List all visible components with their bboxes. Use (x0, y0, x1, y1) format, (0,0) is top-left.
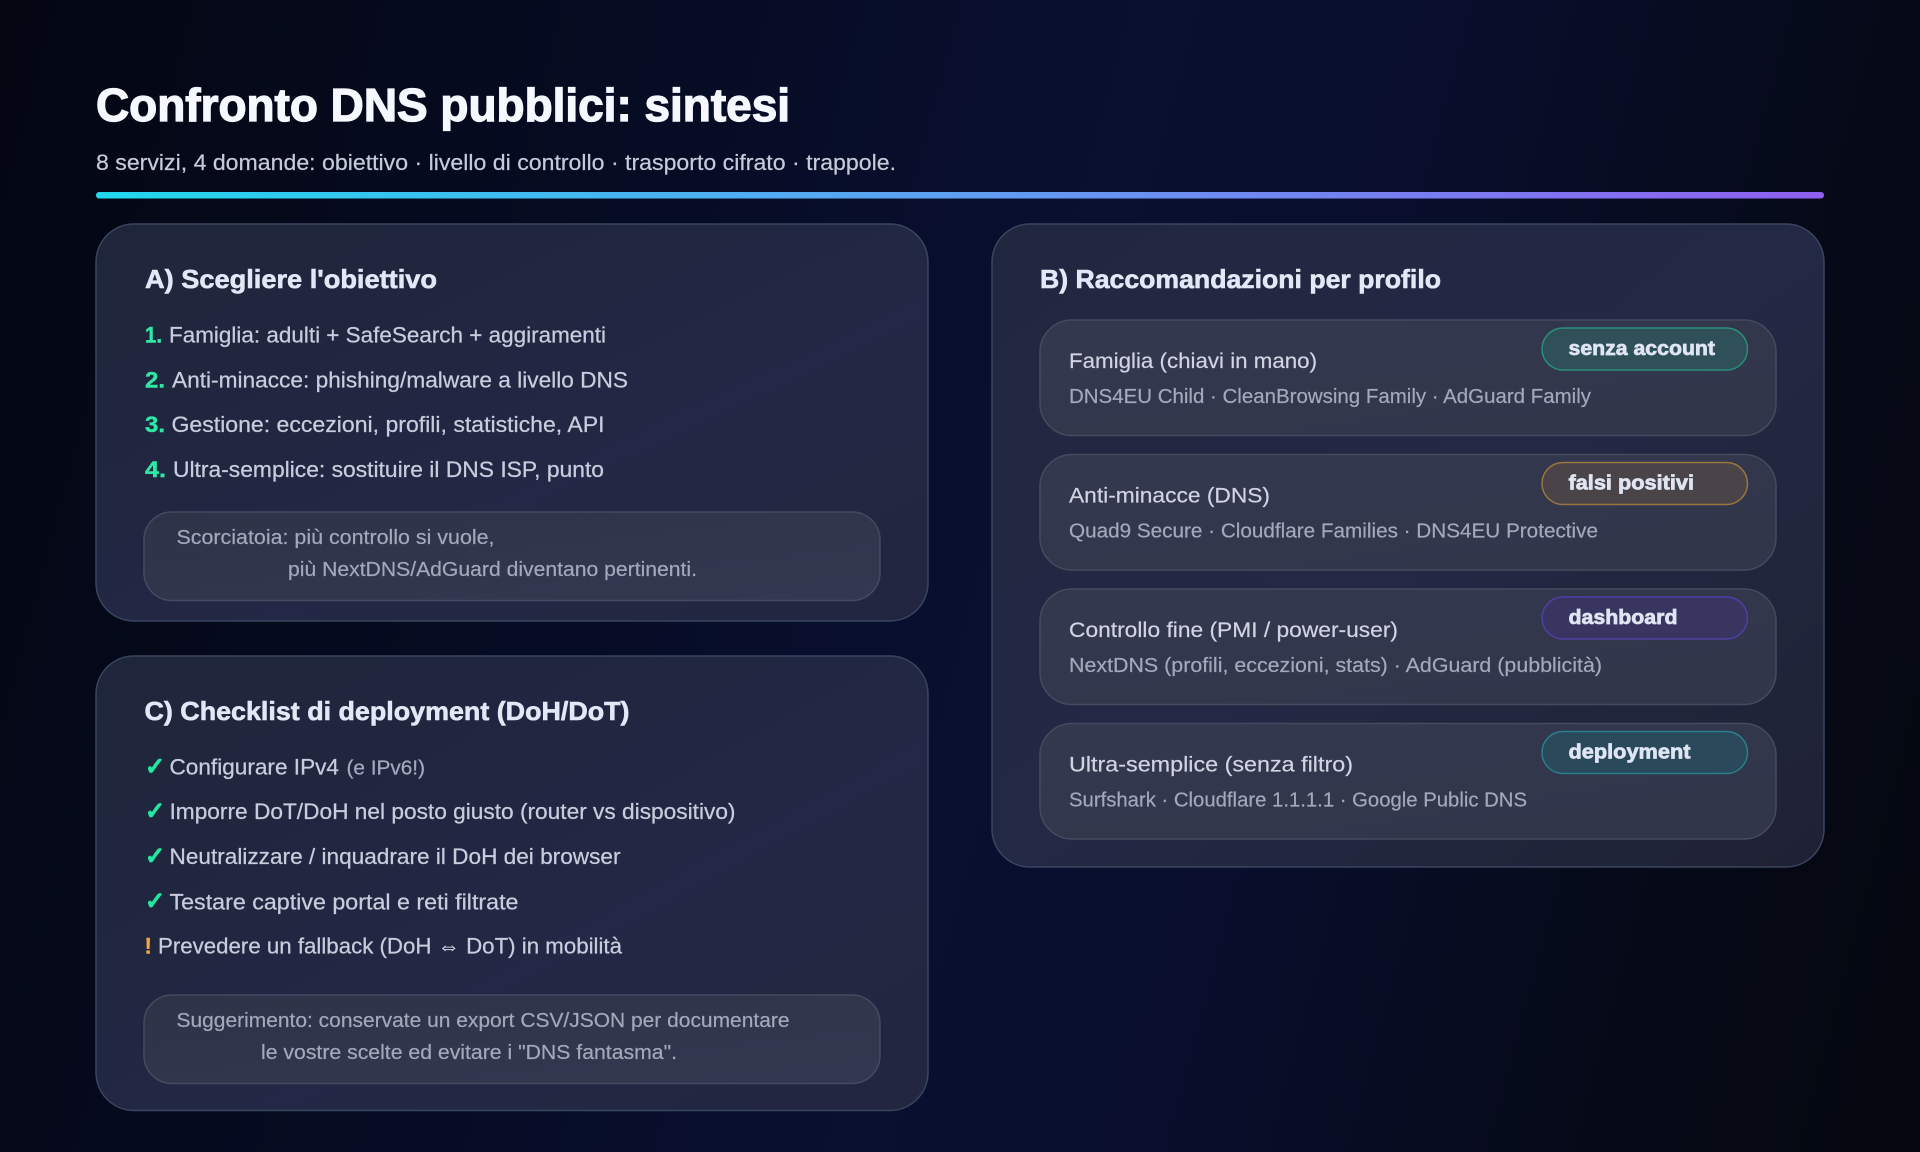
checklist item 2: ✓ (145, 797, 165, 825)
heading B: B) Raccomandazioni per profilo (1040, 264, 1441, 294)
heading A: A) Scegliere l'obiettivo (145, 264, 437, 294)
list item 3: 3. (145, 412, 165, 437)
checklist item 5: warning: Prevedere un fallback (DoH ⇔ DoT) in mobilità (158, 934, 623, 958)
profile: ultra-semplice: Ultra-semplice (senza filtro) (1069, 752, 1353, 776)
callout: scorciatoia (144, 512, 880, 600)
profile: ultra-semplice: Surfshark · Cloudflare 1.1.1.1 · Google Public DNS (1069, 790, 1527, 812)
profile: anti-minacce (1040, 454, 1776, 570)
badge: falsi positivi (1542, 462, 1748, 504)
badge: deployment (1542, 732, 1748, 774)
profile: controllo fine (1040, 589, 1776, 704)
callout: scorciatoia: più NextDNS/AdGuard diventano pertinenti. (288, 559, 697, 581)
panel: C) Checklist di deployment (96, 656, 928, 1110)
badge: dashboard (1542, 597, 1748, 639)
profile: famiglia: Famiglia (chiavi in mano) (1069, 349, 1317, 373)
list item 2: Anti-minacce: phishing/malware a livello DNS (172, 368, 628, 392)
badge: senza account: senza account (1568, 338, 1715, 360)
list item 4: Ultra-semplice: sostituire il DNS ISP, punto (173, 457, 604, 482)
profile: famiglia (1040, 320, 1776, 436)
panel: B) Raccomandazioni per profilo (992, 224, 1824, 867)
list item 4: 4. (145, 457, 166, 482)
checklist item 1: ✓ (145, 752, 165, 780)
profile: famiglia: DNS4EU Child · CleanBrowsing Family · AdGuard Family (1069, 386, 1591, 408)
list item 1: Famiglia: adulti + SafeSearch + aggiramenti (169, 322, 606, 348)
profile: ultra-semplice (1040, 724, 1776, 839)
checklist item 1: Configurare IPv4 (170, 754, 339, 780)
subtitle: 8 servizi, 4 domande: obiettivo · livello di controllo · trasporto cifrato · trappole. (96, 150, 896, 175)
profile: anti-minacce: Anti-minacce (DNS) (1069, 484, 1270, 508)
profile: anti-minacce: Quad9 Secure · Cloudflare Families · DNS4EU Protective (1069, 520, 1598, 542)
checklist item 5: warning: ! (144, 934, 152, 958)
checklist item 1: (e IPv6!) (346, 758, 425, 780)
checklist item 3: ✓ (145, 842, 165, 870)
badge: deployment: deployment (1568, 742, 1691, 764)
badge: falsi positivi: falsi positivi (1568, 472, 1694, 494)
checklist item 1 (145, 752, 425, 780)
checklist item 4: ✓ (145, 887, 165, 915)
panel: A) Scegliere l'obiettivo (96, 224, 928, 621)
profile: controllo fine: NextDNS (profili, eccezioni, stats) · AdGuard (pubblicità) (1069, 655, 1602, 677)
callout: scorciatoia: Scorciatoia: più controllo si vuole, (176, 527, 494, 549)
checklist item 3: Neutralizzare / inquadrare il DoH dei browser (170, 844, 620, 869)
badge: senza account (1542, 328, 1748, 370)
checklist item 4: Testare captive portal e reti filtrate (170, 890, 518, 914)
profile: controllo fine: Controllo fine (PMI / power-user) (1069, 618, 1398, 642)
title: Confronto DNS pubblici: sintesi (96, 79, 790, 131)
checklist item 2: Imporre DoT/DoH nel posto giusto (router vs dispositivo) (170, 799, 736, 824)
badge: dashboard: dashboard (1568, 607, 1678, 629)
list item 3: Gestione: eccezioni, profili, statistiche, API (172, 412, 604, 437)
callout: suggerimento (144, 995, 880, 1084)
callout: suggerimento: le vostre scelte ed evitare i "DNS fantasma". (261, 1042, 677, 1064)
list item 1: 1. (145, 322, 162, 348)
list item 2: 2. (145, 368, 165, 392)
heading C: C) Checklist di deployment (DoH/DoT) (144, 696, 630, 726)
callout: suggerimento: Suggerimento: conservate un export CSV/JSON per documentare (176, 1010, 790, 1032)
gradient header rule (96, 192, 1824, 198)
